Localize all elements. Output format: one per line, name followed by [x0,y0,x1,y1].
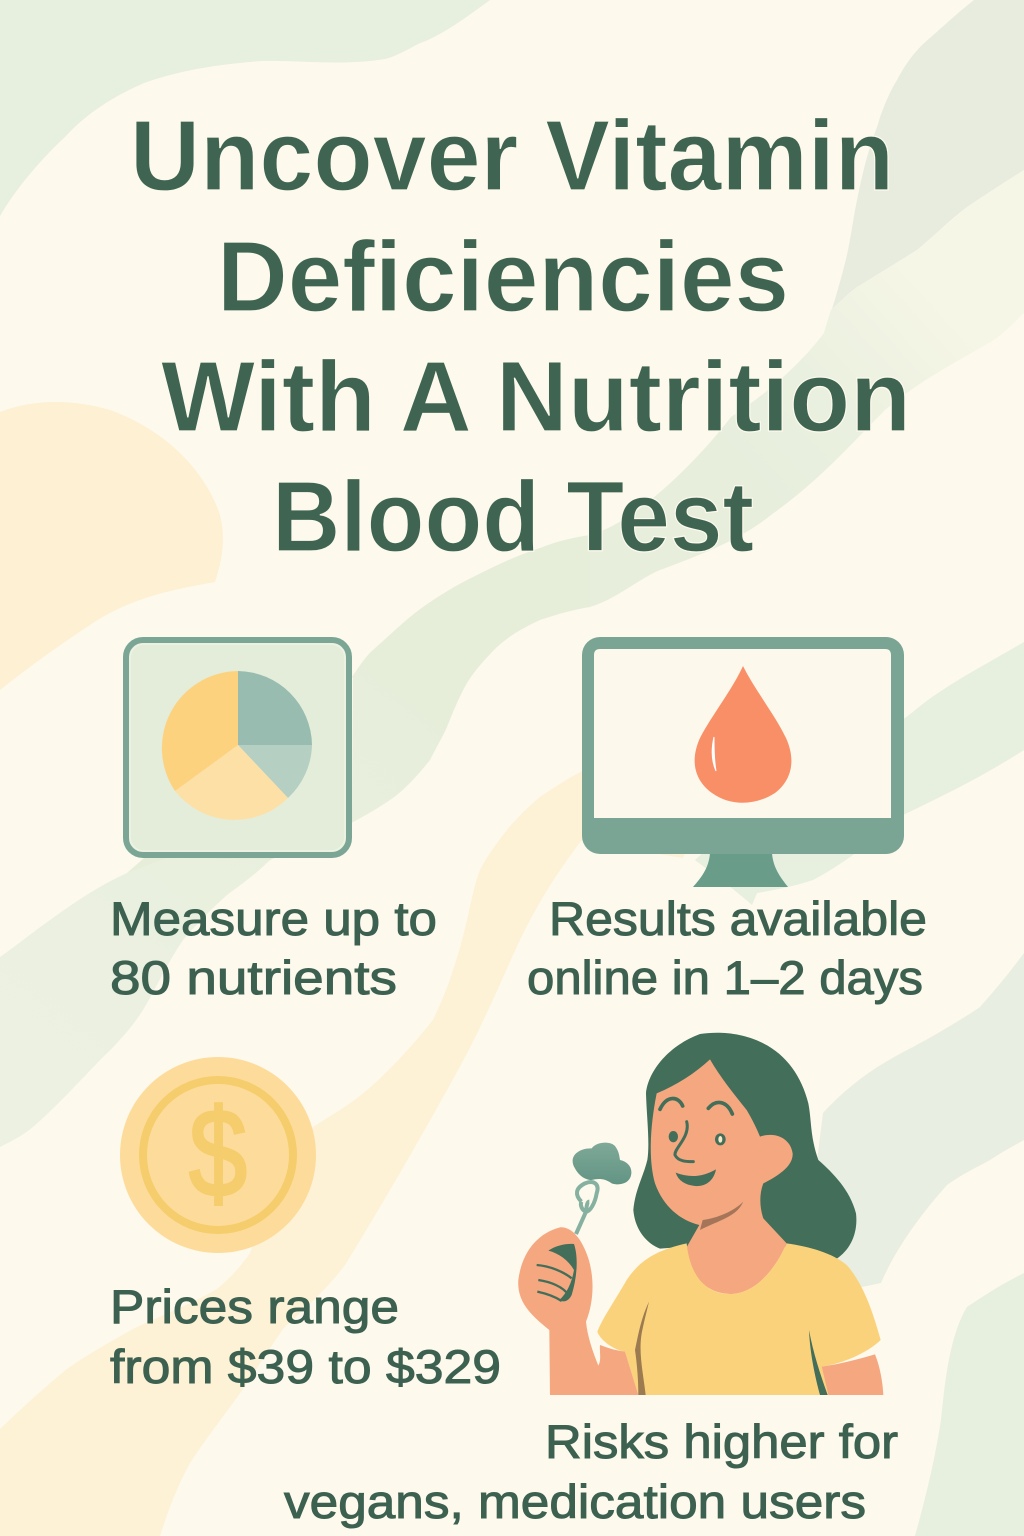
fist shadow and finger lines [537,1244,577,1301]
title: Uncover Vitamin [130,100,894,212]
label: prices: from $39 to $329 [110,1340,501,1393]
shirt folds [635,1302,649,1395]
label: risks: Risks higher for [545,1415,898,1468]
title [130,100,911,573]
left arm and hand [518,1227,638,1395]
icon: monitor with blood drop [582,637,904,887]
chin shadow [700,1202,743,1230]
label: results [527,892,927,1004]
label: risks [284,1415,898,1528]
icon: pie chart panel [126,640,349,855]
eyes [669,1131,726,1145]
background: main diagonal green band, upper part [590,170,1024,607]
face and neck [651,1059,793,1294]
t-shirt [597,1243,881,1395]
illustration: woman holding broccoli on a fork [518,1033,883,1395]
background: top-right green wave [824,0,1024,333]
icon: dollar coin [120,1057,316,1253]
background: central fill of band behind pie panel [127,677,353,873]
hair [633,1033,856,1259]
title: Blood Test [272,461,754,573]
label: results: online in 1–2 days [527,951,923,1004]
label: measure: Measure up to [110,892,437,945]
title: Deficiencies [217,221,789,333]
background: bottom-right green wave [915,1273,1024,1536]
mouth [676,1169,716,1186]
background: right green band behind woman [800,953,1024,1300]
pie slices [162,671,312,820]
background: main diagonal green band, lower part [0,535,590,1147]
background: yellow diagonal band [0,735,720,1536]
background: right green band behind monitor [695,642,1024,905]
label: risks: vegans, medication users [284,1475,866,1528]
background: top-left green wave [0,0,490,216]
label: prices [110,1280,501,1393]
background: peach blob left [0,402,223,690]
label: measure [110,892,437,1004]
eyebrows [660,1099,732,1114]
label: results: Results available [549,892,927,945]
right arm [822,1354,883,1395]
nose [675,1122,693,1162]
label: measure: 80 nutrients [110,951,397,1004]
broccoli [573,1143,631,1184]
blood drop [695,666,791,803]
label: prices: Prices range [110,1280,399,1333]
title: With A Nutrition [161,341,911,453]
fork [576,1182,598,1234]
icon: dollar coin: $ [189,1085,247,1223]
